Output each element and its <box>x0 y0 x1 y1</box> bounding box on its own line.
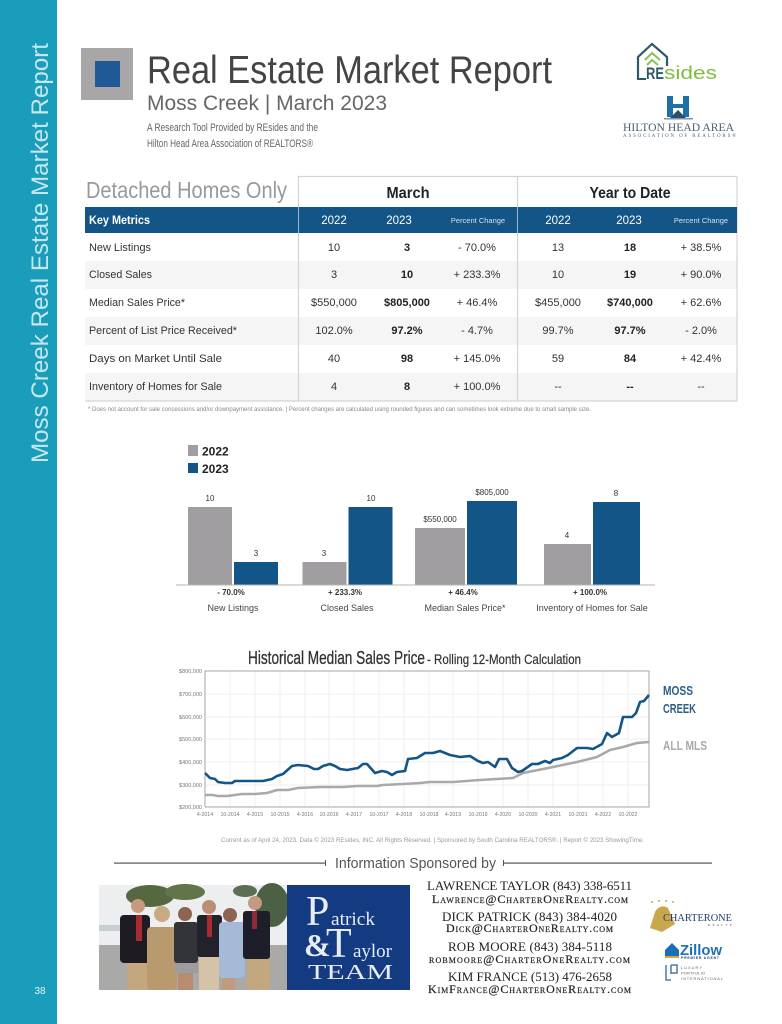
team logo panel: atrick <box>331 909 375 930</box>
group: new listings: 3 <box>254 549 259 558</box>
contact: dick patrick <box>442 909 617 935</box>
contact: rob moore: ROB MOORE (843) 384-5118 <box>448 939 612 954</box>
row: new listings: New Listings <box>89 242 151 254</box>
table: key metrics <box>85 176 737 401</box>
row: median sales price: $550,000 <box>311 297 357 309</box>
contact: lawrence taylor: Lawrence@CharterOneRealty.com <box>432 892 628 906</box>
row: inventory: 4 <box>331 381 337 393</box>
group: inventory: + 100.0% <box>573 588 607 597</box>
row: new listings: 13 <box>552 242 564 254</box>
y axis labels: $600,000 <box>179 715 202 721</box>
logo: charter one: CHARTERONE <box>663 912 732 924</box>
contact: dick patrick: Dick@CharterOneRealty.com <box>446 921 613 935</box>
person 3 <box>174 907 198 990</box>
row: percent of list price: 97.7% <box>614 325 646 337</box>
row: closed sales: + 90.0% <box>681 269 722 281</box>
heading: detached homes only: Detached Homes Only <box>86 177 287 203</box>
x axis labels: 4-2019 <box>445 812 461 818</box>
row: inventory: + 100.0% <box>454 381 501 393</box>
row: new listings: 10 <box>328 242 340 254</box>
logo: zillow: PREMIER AGENT <box>681 956 720 960</box>
team logo panel: T <box>326 921 352 967</box>
person 1 <box>120 899 150 990</box>
data source note: Current as of April 24, 2023. Data © 2023 REsides, INC. All Rights Reserved. | Sponsored by South Carolina REALTORS®. | Report © 2023 ShowingTime. <box>221 836 644 844</box>
x axis labels: 10-2021 <box>568 812 588 818</box>
moss creek line <box>205 695 649 783</box>
logo: Hilton Head Area: ASSOCIATION OF REALTORS® <box>623 133 736 139</box>
footnote: * Does not account for sale concessions and/or downpayment assistance. | Percent changes are calculated using rounded figures and can sometimes look extreme due to small sample size. <box>88 406 591 413</box>
group: closed sales <box>302 494 392 613</box>
table frame <box>85 176 737 401</box>
baseline <box>176 584 655 586</box>
group: new listings: - 70.0% <box>217 588 245 597</box>
contact: kim france <box>428 969 631 996</box>
group: new listings: New Listings <box>207 603 259 613</box>
person 6 <box>243 896 270 990</box>
series label: moss creek: MOSS <box>663 683 693 698</box>
logo: charter one <box>650 900 732 932</box>
x axis labels: 10-2016 <box>319 812 339 818</box>
team logo panel <box>287 885 410 990</box>
y axis labels: $400,000 <box>179 760 202 766</box>
logo: Hilton Head Area: HILTON HEAD AREA <box>623 122 735 134</box>
row: closed sales: 10 <box>401 269 413 281</box>
period headers: Year to Date <box>590 185 671 202</box>
logo: REsides <box>638 44 717 83</box>
row: closed sales: 10 <box>552 269 564 281</box>
group: inventory <box>536 489 648 613</box>
row: inventory <box>89 381 705 393</box>
y axis labels: $300,000 <box>179 783 202 789</box>
logo: charter one: REALTY <box>708 923 732 927</box>
row: median sales price: Median Sales Price* <box>89 297 186 309</box>
row: median sales price: $805,000 <box>384 297 430 309</box>
x axis labels: 4-2014 <box>197 812 213 818</box>
y axis labels: $800,000 <box>179 669 202 675</box>
x axis labels: 10-2018 <box>419 812 439 818</box>
period headers: March <box>386 185 430 202</box>
row: inventory: -- <box>554 381 562 393</box>
person 2 <box>147 906 177 990</box>
y axis labels <box>179 669 202 811</box>
row: days on market: 98 <box>401 353 413 365</box>
series label: moss creek <box>663 683 696 716</box>
title block <box>147 49 552 150</box>
x axis labels <box>197 812 638 818</box>
legend: 2022 <box>202 444 229 458</box>
group: inventory: 8 <box>614 489 619 498</box>
person 5 <box>219 908 245 990</box>
row: median sales price: + 62.6% <box>681 297 722 309</box>
x axis labels: 10-2017 <box>369 812 389 818</box>
row: median sales price: $455,000 <box>535 297 581 309</box>
row: inventory: -- <box>626 381 634 393</box>
row: closed sales: 19 <box>624 269 636 281</box>
row: new listings: 18 <box>624 242 636 254</box>
logo: luxury portfolio: PORTFOLIO <box>681 970 705 976</box>
contact: kim france: KimFrance@CharterOneRealty.com <box>428 982 631 996</box>
x axis labels: 10-2015 <box>270 812 290 818</box>
row: percent of list price: 102.0% <box>315 325 353 337</box>
icon: header square <box>81 48 133 100</box>
period headers <box>386 185 671 202</box>
team logo panel: TEAM <box>308 960 393 984</box>
sidebar <box>0 0 57 1024</box>
legend <box>188 444 229 476</box>
x axis labels: 4-2016 <box>297 812 313 818</box>
team logo panel: & <box>304 927 331 963</box>
chart title: Historical Median Sales Price <box>248 648 425 668</box>
group: closed sales: + 233.3% <box>328 588 362 597</box>
x axis labels: 10-2014 <box>220 812 240 818</box>
row: median sales price <box>89 297 722 309</box>
row: percent of list price: Percent of List Price Received* <box>89 325 238 337</box>
contact: lawrence taylor: LAWRENCE TAYLOR (843) 338-6511 <box>427 878 632 893</box>
group: median sales price: $805,000 <box>475 488 509 497</box>
y axis labels: $200,000 <box>179 805 202 811</box>
group: closed sales: Closed Sales <box>320 603 374 613</box>
table header bar: 2022 <box>321 215 347 227</box>
zebra rows <box>85 261 737 401</box>
x axis labels: 10-2019 <box>468 812 488 818</box>
logo: REsides: RE <box>646 64 664 83</box>
row: days on market: 40 <box>328 353 340 365</box>
row: days on market <box>89 353 722 365</box>
row: new listings <box>89 242 722 254</box>
row: new listings: - 70.0% <box>458 242 496 254</box>
sponsor heading: Information Sponsored by <box>335 855 496 872</box>
logo: REsides: sides <box>664 63 717 83</box>
table header bar: 2022 <box>545 215 571 227</box>
contact: lawrence taylor <box>427 878 632 906</box>
group: median sales price: $550,000 <box>423 515 457 524</box>
table header bar <box>85 207 737 233</box>
logo: luxury portfolio: LUXURY <box>681 965 702 970</box>
line chart: historical median sales price <box>179 648 707 818</box>
row: median sales price: + 46.4% <box>457 297 498 309</box>
row: days on market: 84 <box>624 353 637 365</box>
title block: Real Estate Market Report <box>147 49 552 92</box>
table header bar: Percent Change <box>451 216 505 225</box>
row: percent of list price: 97.2% <box>391 325 423 337</box>
all mls line <box>205 742 649 796</box>
y axis labels: $700,000 <box>179 692 202 698</box>
x axis labels: 4-2015 <box>247 812 263 818</box>
logo: zillow: Zillow <box>680 942 722 959</box>
row: closed sales: 3 <box>331 269 337 281</box>
bar chart <box>176 444 655 613</box>
contact: rob moore <box>429 939 630 966</box>
x axis labels: 4-2018 <box>396 812 412 818</box>
group: closed sales: 10 <box>367 494 376 503</box>
group: new listings: 10 <box>206 494 215 503</box>
contact: rob moore: robmoore@CharterOneRealty.com <box>429 952 630 966</box>
person 4 <box>197 900 222 990</box>
x axis labels: 4-2021 <box>545 812 561 818</box>
table header bar: Key Metrics <box>89 213 150 227</box>
logo: luxury portfolio: INTERNATIONAL <box>681 976 724 981</box>
row: closed sales: Closed Sales <box>89 269 152 281</box>
row: inventory: 8 <box>404 381 410 393</box>
group: new listings <box>188 494 278 613</box>
row: inventory: -- <box>697 381 705 393</box>
logo: zillow <box>665 942 722 960</box>
x axis labels: 4-2022 <box>595 812 611 818</box>
row: percent of list price: - 2.0% <box>685 325 717 337</box>
team photo <box>99 883 289 990</box>
row: days on market: Days on Market Until Sale <box>89 353 222 365</box>
x axis labels: 4-2017 <box>346 812 362 818</box>
team logo panel: P <box>306 889 329 935</box>
row: inventory: Inventory of Homes for Sale <box>89 381 222 393</box>
table header bar: 2023 <box>386 215 412 227</box>
sidebar: Moss Creek Real Estate Market Report <box>27 43 54 463</box>
contact list <box>427 878 632 996</box>
logo: Hilton Head Area <box>623 96 736 139</box>
group: median sales price <box>415 488 517 613</box>
sidebar: 38 <box>34 986 46 997</box>
x axis labels: 10-2022 <box>618 812 638 818</box>
x axis labels: 10-2020 <box>518 812 538 818</box>
group: inventory: Inventory of Homes for Sale <box>536 603 648 613</box>
group: inventory: 4 <box>565 531 570 540</box>
row: new listings: 3 <box>404 242 410 254</box>
x axis labels: 4-2020 <box>495 812 511 818</box>
contact: kim france: KIM FRANCE (513) 476-2658 <box>448 969 612 984</box>
logo: luxury portfolio <box>666 965 724 981</box>
row: days on market: + 145.0% <box>454 353 501 365</box>
group: median sales price: Median Sales Price* <box>424 603 506 613</box>
chart title: - Rolling 12-Month Calculation <box>427 651 581 667</box>
title block: Moss Creek | March 2023 <box>147 92 387 115</box>
group: closed sales: 3 <box>322 549 327 558</box>
team logo panel: aylor <box>353 941 393 962</box>
row: percent of list price <box>89 325 717 337</box>
legend: 2023 <box>202 462 229 476</box>
row: percent of list price: 99.7% <box>542 325 574 337</box>
row: median sales price: $740,000 <box>607 297 653 309</box>
row: days on market: + 42.4% <box>681 353 722 365</box>
table header bar: Percent Change <box>674 216 728 225</box>
title block: Hilton Head Area Association of REALTORS® <box>147 138 313 150</box>
row: closed sales <box>89 269 722 281</box>
row: closed sales: + 233.3% <box>454 269 501 281</box>
row: percent of list price: - 4.7% <box>461 325 493 337</box>
series label: all mls: ALL MLS <box>663 738 707 753</box>
row: new listings: + 38.5% <box>681 242 722 254</box>
contact: dick patrick: DICK PATRICK (843) 384-4020 <box>442 909 617 924</box>
title block: A Research Tool Provided by REsides and the <box>147 122 318 134</box>
y axis labels: $500,000 <box>179 737 202 743</box>
table header bar: 2023 <box>616 215 642 227</box>
series label: moss creek: CREEK <box>663 701 696 716</box>
row: days on market: 59 <box>552 353 564 365</box>
group: median sales price: + 46.4% <box>448 588 478 597</box>
